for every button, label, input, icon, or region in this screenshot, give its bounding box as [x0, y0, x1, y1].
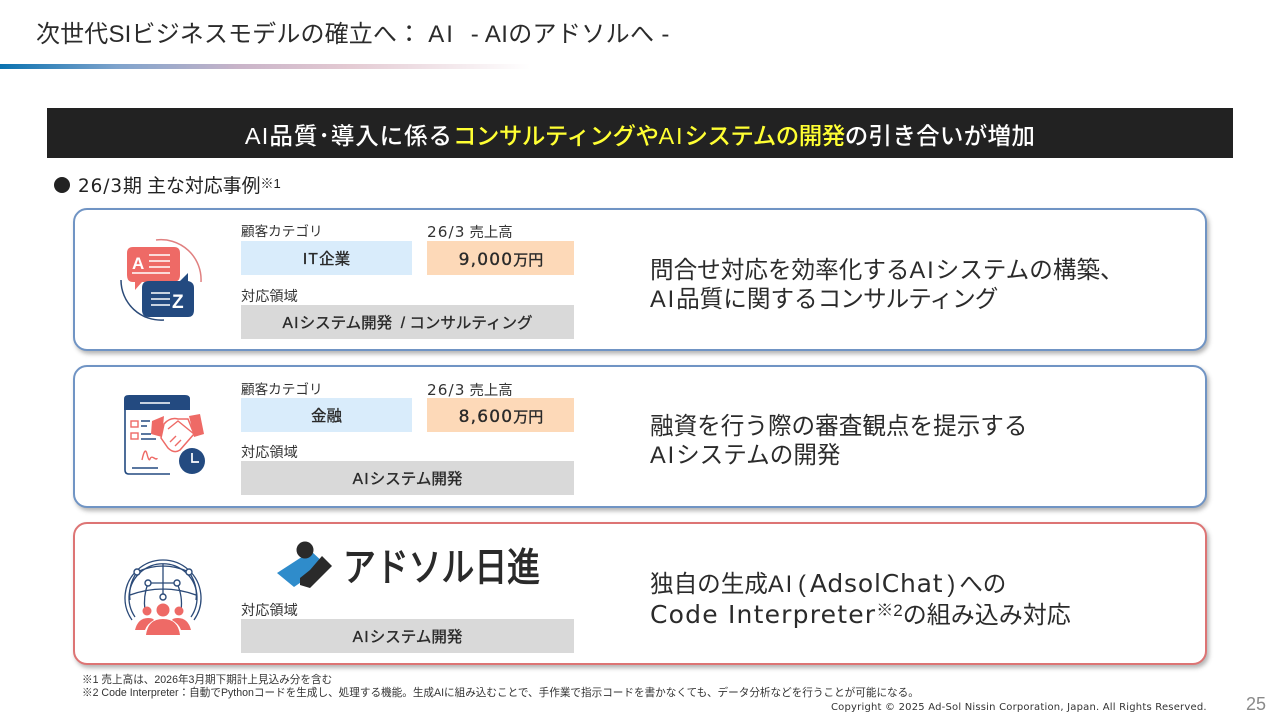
label: scope: 対応領域 — [241, 289, 298, 305]
label: customer category: 顧客カテゴリ — [241, 382, 323, 397]
label: scope: 対応領域 — [241, 445, 298, 461]
value: scope — [241, 619, 574, 653]
value: scope — [241, 461, 574, 495]
value: sales 9000 — [427, 241, 574, 275]
title gradient rule — [0, 64, 530, 69]
panel: in-house case — [73, 522, 1207, 665]
footnotes: ※2 Code Interpreter：自動でPythonコードを生成し、処理する機能。生成AIに組み込むことで、手作業で指示コードを書かなくても、データ分析などを行うことが可能になる。 — [82, 687, 919, 699]
copyright: Copyright © 2025 Ad-Sol Nissin Corporation, Japan. All Rights Reserved. — [831, 702, 1207, 713]
panel: finance case — [73, 365, 1207, 508]
value: finance — [241, 398, 412, 432]
icon: chat bubbles: A — [132, 254, 144, 273]
icon: chat bubbles — [120, 238, 202, 321]
description — [650, 258, 1124, 313]
panel: IT company case — [73, 208, 1207, 351]
value: IT company: IT企業 — [303, 251, 350, 268]
description: 問合せ対応を効率化するAIシステムの構築、 — [650, 258, 1124, 284]
value: sales 9000: 9,000万円 — [459, 250, 543, 270]
description: 独自の生成AI(AdsolChat)への — [650, 569, 1006, 598]
footnotes: ※1 売上高は、2026年3月期下期計上見込み分を含む — [82, 674, 332, 686]
value: scope — [241, 305, 574, 339]
section heading: 26/3期 主な対応事例※1 — [78, 176, 281, 197]
value: scope: AIシステム開発 / コンサルティング — [283, 315, 532, 332]
icon: globe and people — [124, 559, 202, 635]
title: 次世代SIビジネスモデルの確立へ： AI - AIのアドソルへ - — [36, 21, 670, 48]
label: customer category: 顧客カテゴリ — [241, 224, 323, 239]
footnotes — [82, 674, 919, 699]
label: sales: 26/3 売上高 — [427, 223, 513, 241]
description — [650, 414, 1028, 469]
value: sales 8600 — [427, 398, 574, 432]
label: sales: 26/3 売上高 — [427, 381, 513, 399]
headline banner: AI品質･導入に係るコンサルティングやAIシステムの開発の引き合いが増加 — [245, 123, 1035, 149]
value: finance: 金融 — [311, 408, 342, 425]
description: AIシステムの開発 — [650, 443, 841, 469]
label: scope: 対応領域 — [241, 603, 298, 619]
description: Code Interpreter※2の組み込み対応 — [650, 600, 1071, 629]
description: AI品質に関するコンサルティング — [650, 287, 997, 313]
icon: chat bubbles: Z — [172, 292, 184, 313]
value: scope: AIシステム開発 — [353, 629, 462, 646]
value: sales 8600: 8,600万円 — [459, 407, 543, 427]
description — [650, 569, 1071, 629]
page number: 25 — [1246, 694, 1266, 714]
headline banner — [47, 108, 1233, 158]
description: 融資を行う際の審査観点を提示する — [650, 414, 1028, 440]
logo: Ad-Sol Nissin — [277, 542, 540, 590]
value: scope: AIシステム開発 — [353, 471, 462, 488]
icon: contract handshake — [124, 395, 205, 475]
value: IT company — [241, 241, 412, 275]
